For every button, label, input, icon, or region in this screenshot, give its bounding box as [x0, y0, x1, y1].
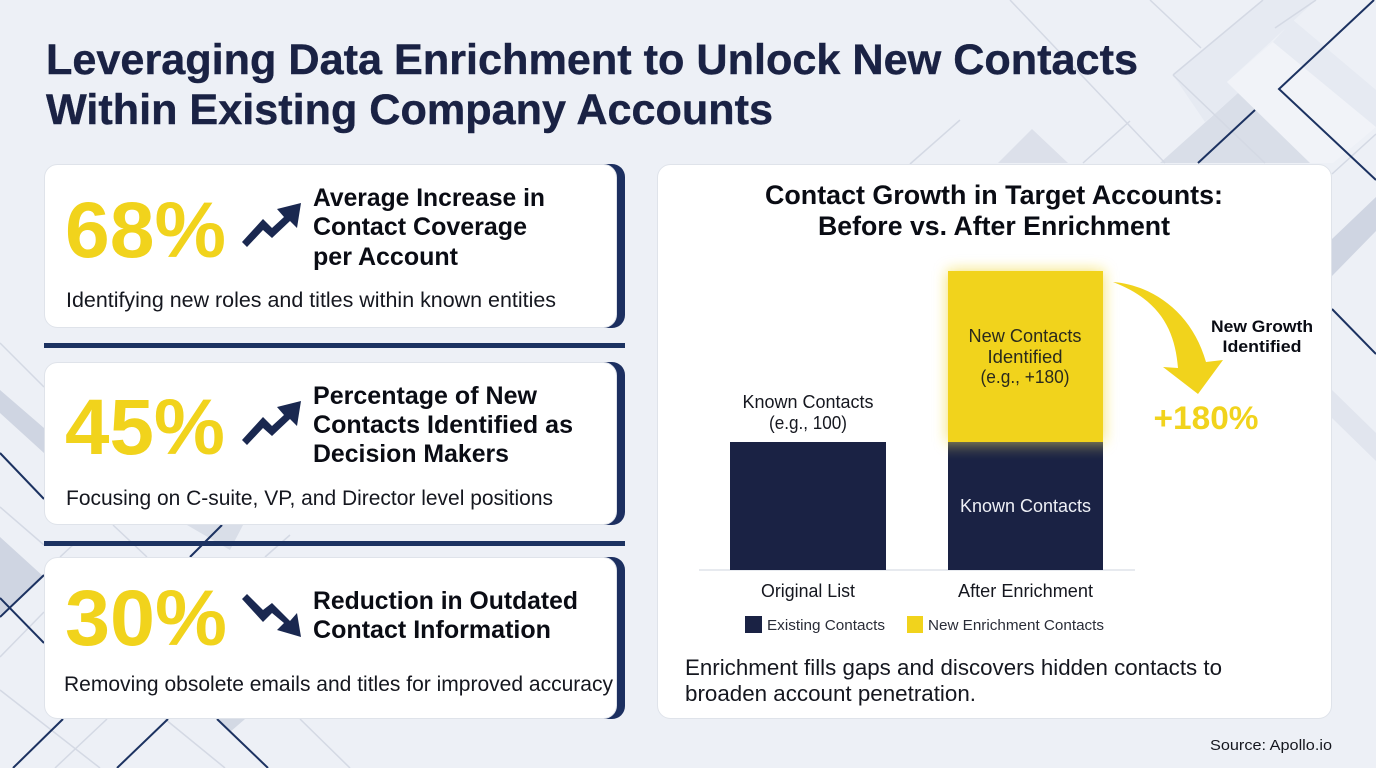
axis label: original: Original List [761, 581, 855, 601]
bar: new contacts [948, 271, 1103, 442]
legend [745, 616, 1104, 634]
label: new contacts [968, 326, 1082, 387]
panel: stat card 68% [44, 164, 625, 328]
heading: coverage [313, 184, 545, 271]
callout: new growth: New Growth [1211, 317, 1313, 336]
heading: coverage: Contact Coverage [313, 213, 527, 241]
stat: 30%: 30% [65, 573, 227, 662]
title [46, 36, 1138, 134]
panel: stat card 30% [44, 557, 625, 719]
chart summary: Enrichment fills gaps and discovers hidden contacts to [685, 655, 1222, 680]
description: decision makers: Focusing on C-suite, VP, and Director level positions [66, 487, 553, 510]
heading: decision makers: Decision Makers [313, 440, 509, 468]
icon: arrow up [242, 401, 301, 445]
label: new contacts: New Contacts [968, 326, 1082, 346]
arrow: growth [1113, 282, 1223, 394]
panel: stat card 45% [44, 362, 625, 525]
bar chart [699, 271, 1135, 601]
heading: decision makers: Contacts Identified as [313, 411, 573, 439]
description: outdated: Removing obsolete emails and titles for improved accuracy [64, 673, 613, 696]
chart summary: broaden account penetration. [685, 681, 976, 706]
label: new contacts: (e.g., +180) [980, 367, 1070, 387]
stat: 68%: 68% [65, 185, 226, 274]
label: known contacts original: Known Contacts [742, 392, 874, 412]
chart summary [685, 655, 1222, 706]
legend: New Enrichment Contacts [928, 617, 1104, 634]
label: known contacts original: (e.g., 100) [769, 413, 847, 433]
icon: arrow up [242, 203, 301, 247]
title: Within Existing Company Accounts [46, 86, 773, 134]
label: new contacts: Identified [988, 347, 1062, 367]
source: Source: Apollo.io [1210, 737, 1332, 754]
heading: coverage: per Account [313, 243, 459, 271]
panel: chart [658, 164, 1332, 718]
chart heading: Before vs. After Enrichment [818, 211, 1170, 241]
heading: decision makers [313, 382, 573, 468]
icon: arrow down [242, 594, 301, 637]
heading: coverage: Average Increase in [313, 184, 545, 212]
heading: outdated: Reduction in Outdated [313, 587, 578, 615]
callout: +180%: +180% [1154, 400, 1258, 436]
heading: outdated: Contact Information [313, 616, 551, 644]
bar: known contacts [948, 442, 1103, 570]
description: coverage: Identifying new roles and titles within known entities [66, 289, 556, 312]
heading: decision makers: Percentage of New [313, 382, 538, 410]
stat: 45%: 45% [65, 382, 225, 471]
heading: outdated [313, 587, 578, 644]
chart heading: Contact Growth in Target Accounts: [765, 180, 1223, 210]
title: Leveraging Data Enrichment to Unlock New Contacts [46, 36, 1138, 84]
legend: Existing Contacts [767, 617, 885, 634]
chart heading [765, 180, 1223, 241]
label: known contacts in bar: Known Contacts [960, 496, 1091, 516]
axis label: after: After Enrichment [958, 581, 1093, 601]
label: known contacts original [742, 392, 874, 433]
callout: new growth [1211, 317, 1313, 356]
callout: new growth: Identified [1222, 337, 1302, 356]
bar: original list [730, 442, 886, 570]
